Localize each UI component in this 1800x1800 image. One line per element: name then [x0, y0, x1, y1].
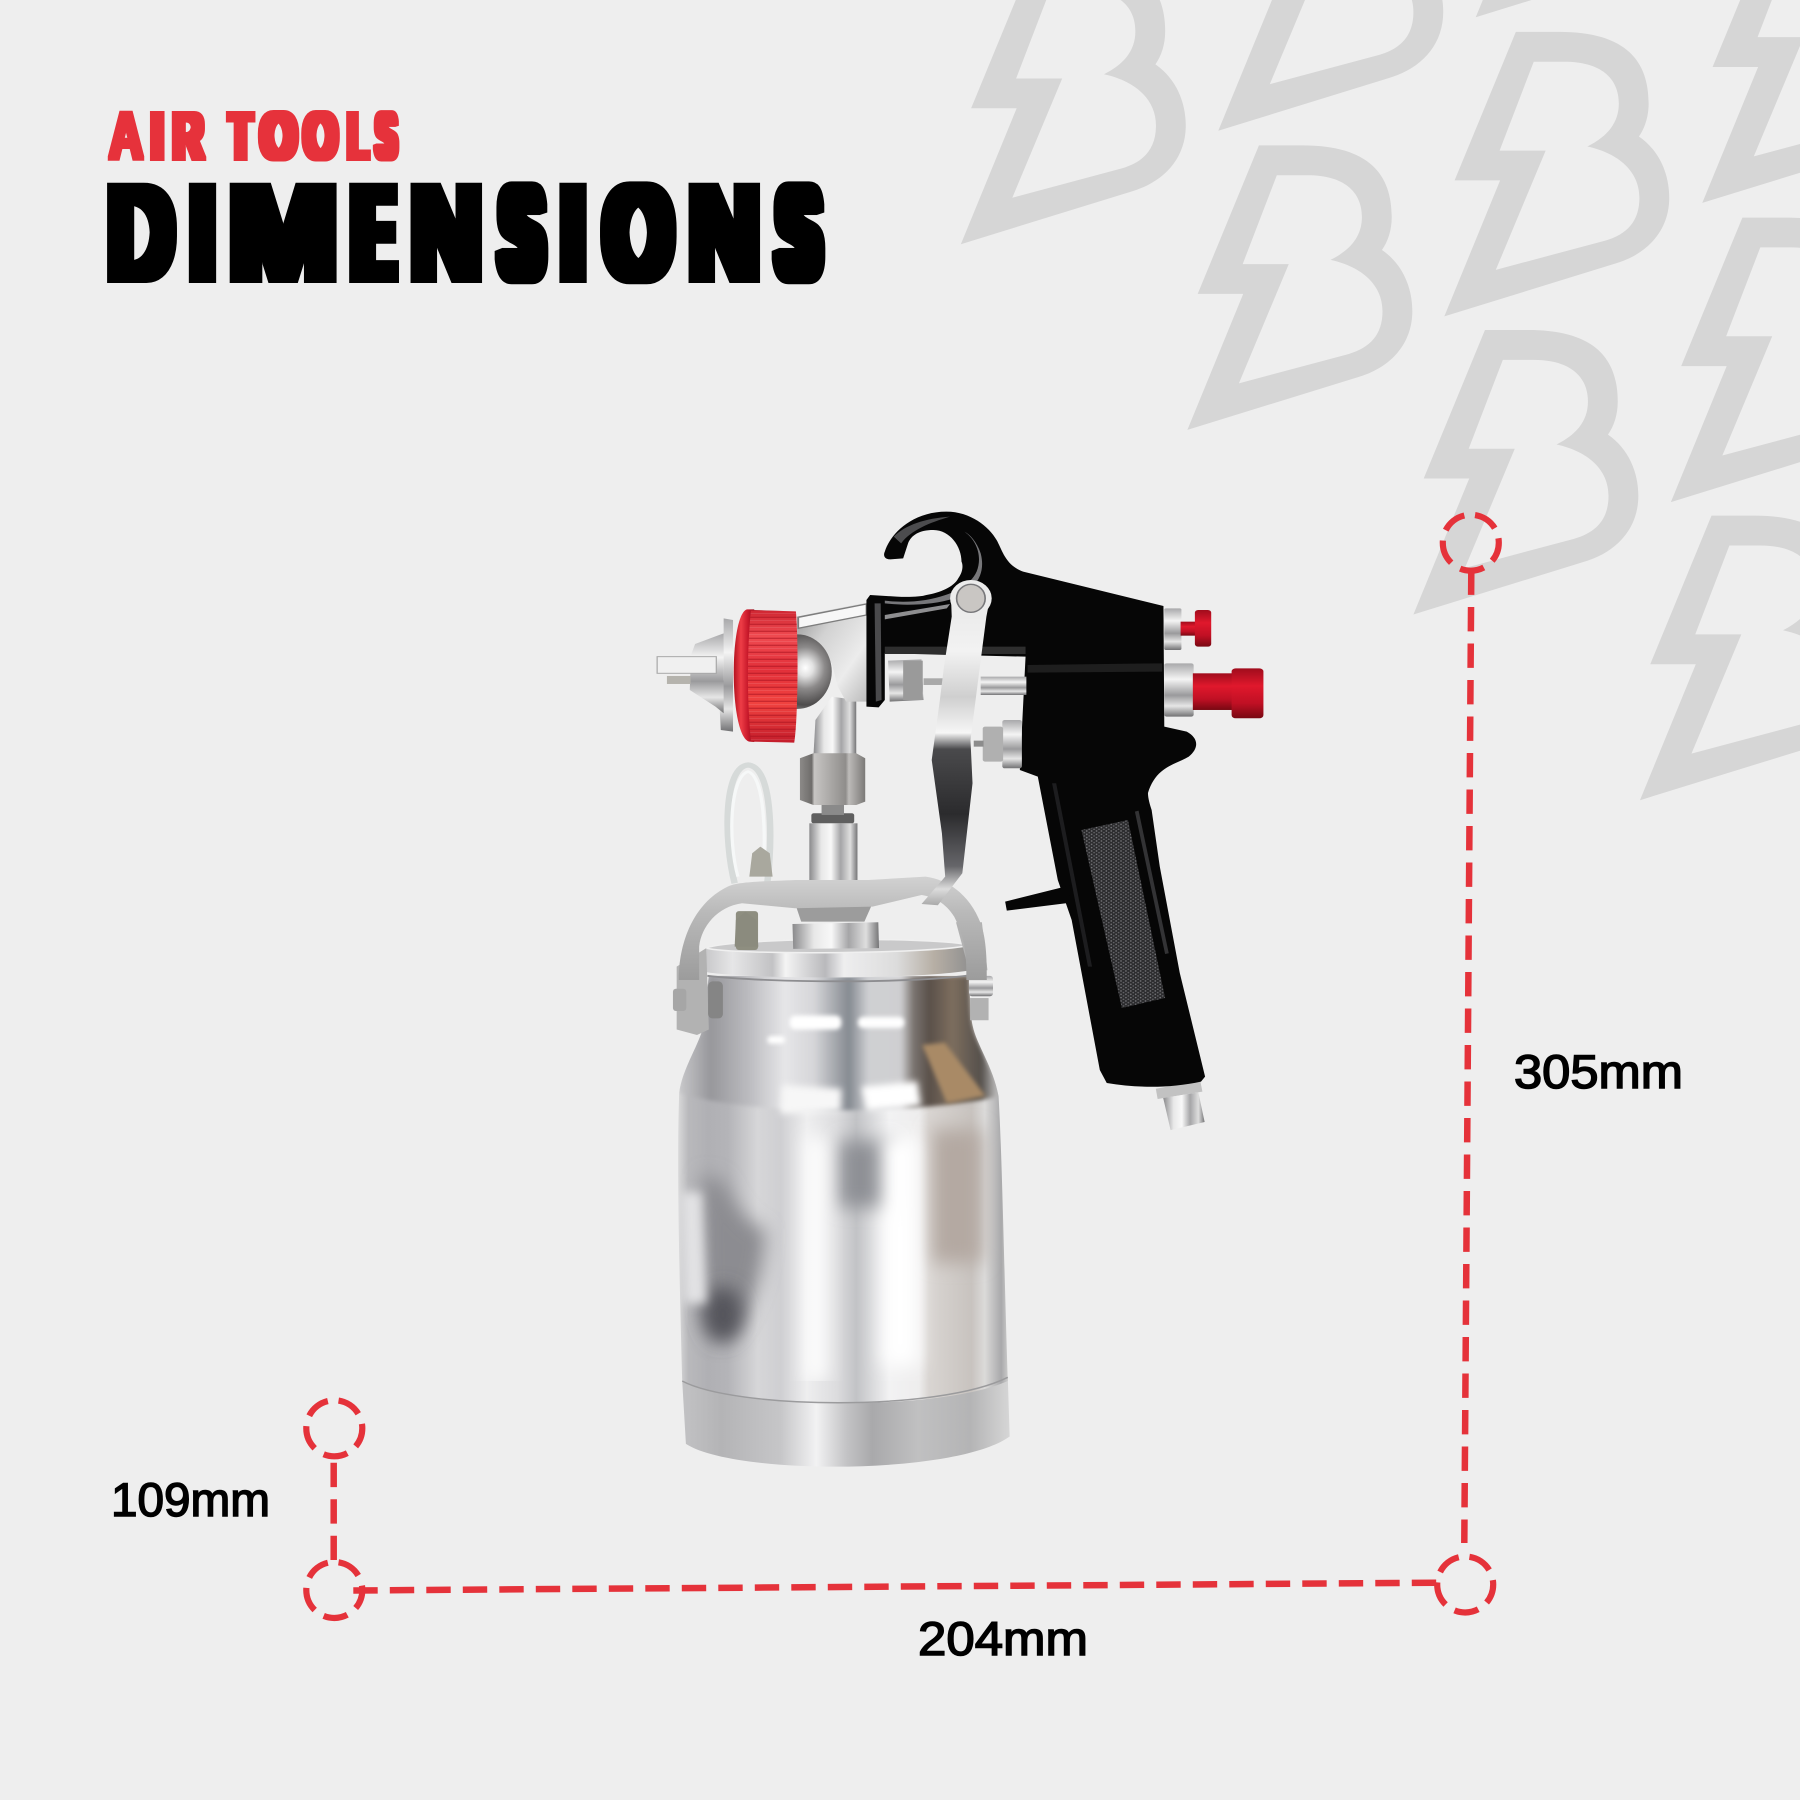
head arm top highlight [798, 604, 866, 628]
central boss [792, 922, 879, 949]
adjusting nut knurl [903, 661, 923, 700]
nozzle wing [657, 657, 716, 673]
central stem [809, 823, 857, 882]
yoke lower block [795, 903, 873, 922]
lower knurled nut [983, 727, 1003, 762]
cap ridges [748, 610, 798, 743]
heading: dimensions: E [355, 159, 391, 308]
gun head and trigger assembly [657, 512, 1263, 1087]
pivot cap [957, 584, 985, 612]
heading: air tools: I [148, 100, 166, 174]
heading: air tools: R [173, 100, 203, 174]
heading: dimensions: M [229, 159, 337, 308]
heading: air tools: A [109, 100, 143, 174]
left bail bracket [677, 948, 709, 1035]
grip pad [1081, 820, 1165, 1008]
inner bracket bolt [708, 981, 723, 1018]
grip left gloss [1052, 783, 1092, 967]
heading: dimensions [107, 159, 826, 308]
grip right gloss [1135, 811, 1169, 954]
clear sight tube [728, 765, 770, 883]
air cap base plate [720, 618, 733, 732]
slot top band [885, 647, 1026, 654]
top marker circle [306, 1400, 362, 1456]
small red knob stem [1181, 622, 1196, 636]
threaded air inlet [1163, 1092, 1205, 1130]
heading: dimensions: D [108, 159, 174, 308]
dimension: height 109mm marker [306, 1400, 362, 1618]
cup lid band [706, 946, 970, 977]
lower hex nut [1002, 720, 1022, 768]
heading: dimensions: I [554, 159, 592, 308]
needle sleeve rod [981, 677, 1026, 695]
front block gloss [885, 604, 950, 619]
base seam line [682, 1377, 1008, 1403]
nozzle lower tab [667, 676, 691, 684]
hook tip gloss [894, 517, 950, 543]
cap knurled ring [748, 610, 798, 743]
body panel line [1028, 663, 1162, 673]
heading: dimensions: O [605, 159, 671, 308]
cup reflections [679, 976, 999, 1381]
bottom marker circle [1437, 1556, 1493, 1612]
adjusting nut [888, 659, 924, 702]
heading: air tools: T [230, 100, 252, 174]
collar neck [822, 802, 844, 815]
product: spray gun with aluminium cup [657, 512, 1263, 1467]
right bracket tip [956, 922, 987, 970]
lid groove [707, 975, 970, 981]
dimension: width 204mm dashed line [353, 1583, 1437, 1590]
chrome trigger lever [922, 580, 991, 905]
label: 305mm: 305mm [1514, 1045, 1683, 1098]
heading: air tools: O [261, 100, 296, 174]
trigger pivot [950, 580, 992, 617]
upper rear hex nut [1164, 608, 1181, 650]
lower fitting on lid [736, 911, 758, 950]
red fluid cap [734, 609, 798, 743]
body gloss [875, 603, 882, 702]
heading: dimensions: I [184, 159, 221, 308]
cup lid rim [706, 939, 969, 953]
label: 109mm: 109mm [111, 1473, 270, 1526]
heading: air tools: O [304, 100, 337, 174]
gun air fitting collar [1156, 1081, 1202, 1099]
right bracket bolt [969, 976, 993, 996]
small red knob cap [1195, 610, 1211, 647]
hook gloss [885, 532, 982, 605]
background pattern: lightning B logos [961, 0, 1800, 800]
black gun body and grip [866, 512, 1205, 1087]
large red knob cap [1232, 668, 1263, 718]
vertical dashed line [1464, 570, 1471, 1543]
elbow pipe [813, 697, 856, 757]
corner marker circle [306, 1562, 362, 1618]
top marker circle [1443, 515, 1499, 571]
large red knob stem [1193, 673, 1233, 710]
lower rear hex nut [1164, 663, 1194, 717]
label: 204mm: 204mm [918, 1612, 1088, 1665]
cup body [678, 976, 1008, 1403]
upper tube fitting [749, 847, 773, 877]
heading: air tools: L [348, 100, 368, 174]
heading: dimensions: S [780, 159, 818, 308]
right bracket block [970, 998, 989, 1020]
dimension: depth 305mm marker [1437, 515, 1499, 1613]
heading: dimensions: N [411, 159, 482, 308]
cap front band [734, 609, 754, 742]
heading: air tools: S [377, 100, 396, 174]
hex nut [800, 753, 865, 805]
air cap cone [690, 633, 724, 713]
needle rod [924, 678, 946, 685]
heading: air tools [108, 100, 400, 174]
lower pin [974, 741, 984, 747]
cup base ring [682, 1377, 1010, 1467]
chrome ball [762, 634, 832, 709]
heading: dimensions: S [503, 159, 541, 308]
lower tube fitting [735, 912, 758, 947]
left bracket bolt [673, 989, 686, 1011]
cast head arm [797, 603, 866, 702]
heading: dimensions: N [689, 159, 759, 308]
tube highlight [732, 772, 764, 877]
stem washer [811, 813, 854, 823]
trigger stop [1005, 885, 1072, 911]
vertical dashed line [330, 1463, 337, 1560]
aluminium paint cup [673, 911, 1205, 1467]
bail arch [679, 877, 987, 980]
